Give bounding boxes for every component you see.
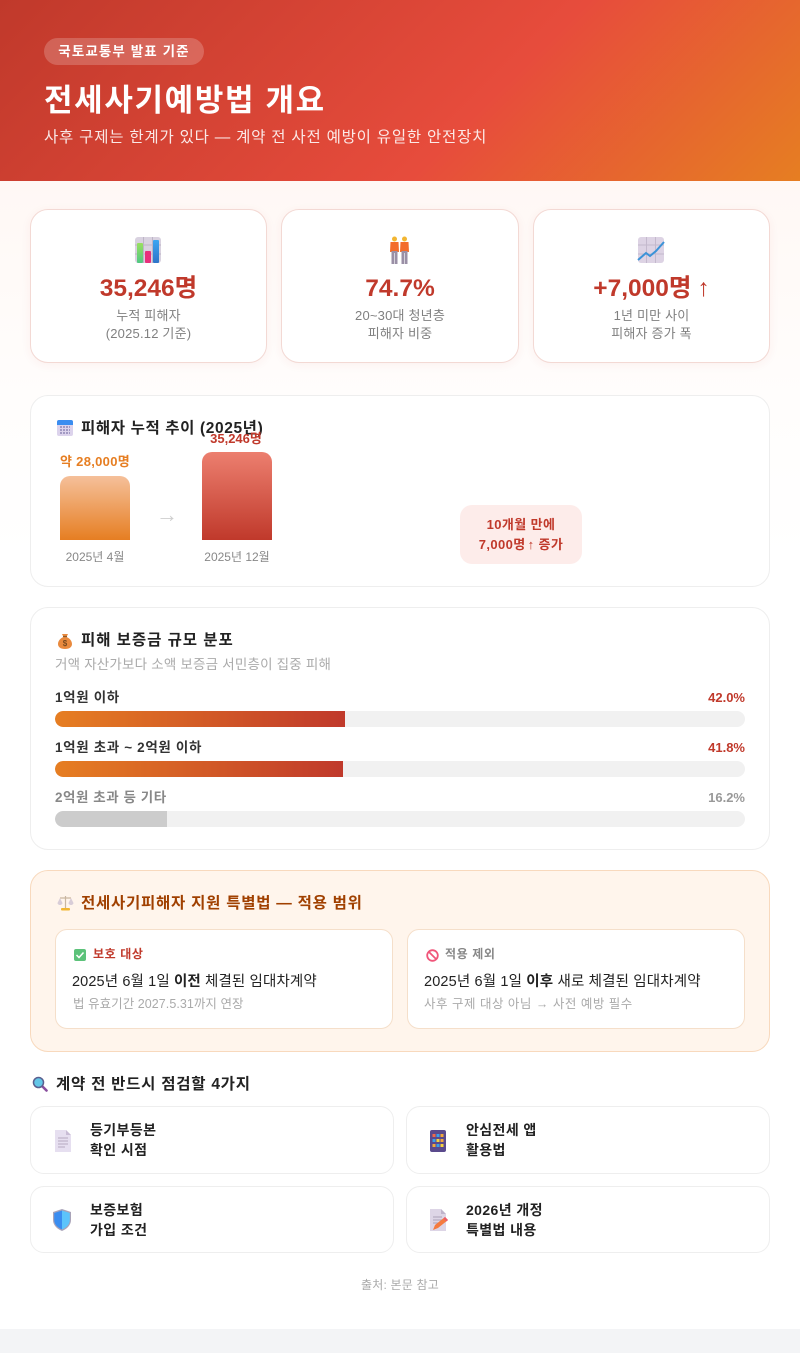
bar [60,476,130,540]
panel: legal scope [30,870,770,1052]
item text: 활용법 [466,1142,506,1158]
icon: shield [53,1209,71,1231]
row value: 42.0% [708,690,745,705]
icon: money bag [58,634,72,649]
item text: 2026년 개정 [466,1202,543,1218]
label: 보호 대상 [93,947,144,961]
stat value: 35,246명 [100,275,197,302]
row label: 2억원 초과 등 기타 [55,790,167,805]
item text [90,1122,156,1158]
bar track 1 [55,711,745,727]
item text: 가입 조건 [90,1222,147,1238]
bar: April 2025 [60,454,130,564]
title: 전세사기예방법 개요 [44,83,326,118]
stat label: 20~30대 청년층 [355,308,445,323]
label: 적용 제외 [445,947,496,961]
item text: 보증보험 [90,1202,143,1218]
icon: calendar [57,420,73,436]
distribution subtitle: 거액 자산가보다 소액 보증금 서민층이 집중 피해 [55,657,331,672]
checklist item: app [406,1106,770,1174]
note: 법 유효기간 2027.5.31까지 연장 [73,997,244,1011]
trend heading: 피해자 누적 추이 (2025년) [81,420,263,437]
main text: 2025년 6월 1일 이후 새로 체결된 임대차계약 [424,974,701,990]
bar track 2 [55,761,745,777]
panel: deposit distribution [30,607,770,850]
bar: December 2025 [202,431,272,564]
item text: 등기부등본 [90,1122,156,1138]
stat label: 피해자 비중 [368,326,432,341]
value label: 35,246명 [210,431,262,446]
checklist item: insurance [30,1186,394,1253]
source badge [44,38,204,65]
source note: 출처: 본문 참고 [361,1278,439,1292]
stat label: 피해자 증가 폭 [611,326,692,341]
item text: 확인 시점 [90,1142,147,1158]
icon: memo with pencil [430,1209,448,1231]
icon: money bag: $ [63,639,68,648]
item text: 특별법 내용 [466,1222,537,1238]
callout: increase: 10개월 만에 [487,517,555,532]
icon: magnifier [32,1076,48,1092]
callout: increase [460,505,582,564]
card: excluded [407,929,745,1029]
panel: cumulative trend [30,395,770,587]
stat value: +7,000명↑ [593,275,710,302]
arrow: → [156,502,178,527]
checklist item: registry [30,1106,394,1174]
row: under 100M won [55,690,745,705]
bar track 3 [55,811,745,827]
icon: abacus tiles [430,1130,446,1152]
checklist heading: 계약 전 반드시 점검할 4가지 [56,1076,251,1093]
stat label: 누적 피해자 [116,308,181,323]
checklist item: revised law [406,1186,770,1253]
main text: 2025년 6월 1일 이전 체결된 임대차계약 [72,974,317,990]
source badge: 국토교통부 발표 기준 [58,44,190,59]
row value: 16.2% [708,790,745,805]
value label: 약 28,000명 [60,454,130,469]
icon: two people [390,236,409,264]
item text [90,1202,147,1238]
icon: scales [58,896,74,910]
month label: 2025년 12월 [204,550,270,564]
note: 사후 구제 대상 아님 → 사전 예방 필수 [424,997,633,1011]
icon: bar chart [135,237,161,263]
callout: increase: 7,000명↑ 증가 [479,537,563,552]
distribution heading: 피해 보증금 규모 분포 [81,632,234,649]
row: 100M to 200M won [55,740,745,755]
subtitle: 사후 구제는 한계가 있다 — 계약 전 사전 예방이 유일한 안전장치 [44,129,487,146]
row value: 41.8% [708,740,745,755]
month label: 2025년 4월 [66,550,124,564]
icon: check mark [74,949,86,961]
header banner [0,0,800,181]
item text: 안심전세 앱 [466,1122,537,1138]
row: other [55,790,745,805]
stat value: 74.7% [365,275,435,302]
row label: 1억원 이하 [55,690,120,705]
stat label [355,308,445,341]
stat label [106,308,191,341]
card: protected [55,929,393,1029]
stat label [611,308,692,341]
row label: 1억원 초과 ~ 2억원 이하 [55,740,202,755]
icon: rising line chart [637,237,665,263]
stat card: increase [533,209,770,363]
icon: prohibited [426,949,439,962]
item text [466,1122,537,1158]
stat label: (2025.12 기준) [106,326,191,341]
legal heading: 전세사기피해자 지원 특별법 — 적용 범위 [81,895,363,912]
icon: document [55,1130,71,1152]
stat card: cumulative victims [30,209,267,363]
item text [466,1202,543,1238]
stat label: 1년 미만 사이 [614,308,689,323]
bar [202,452,272,540]
stat card: youth share [281,209,519,363]
